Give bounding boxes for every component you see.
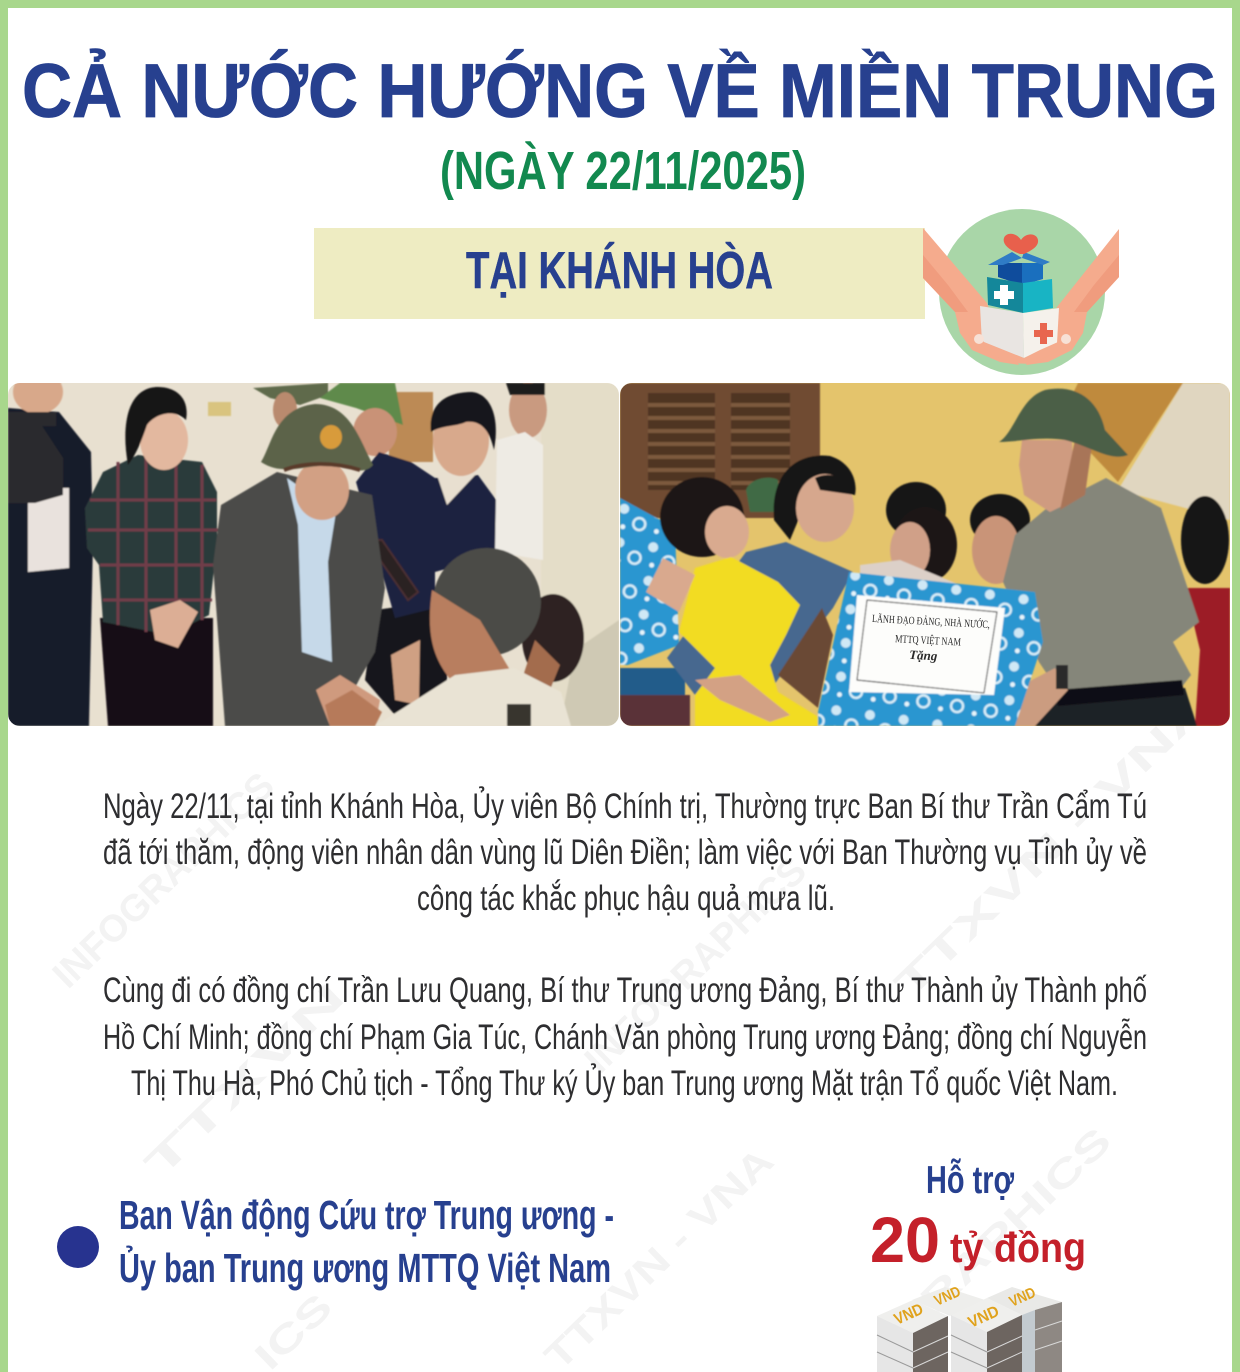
icon: stacks of VND banknotes: VND [932, 1283, 963, 1310]
people in background with helmets [253, 382, 547, 715]
woman and child [646, 455, 856, 726]
paragraph: visit summary: công tác khắc phục hậu quả mưa lũ. [417, 879, 835, 918]
icon: stacks of VND banknotes [877, 1283, 1062, 1372]
support amount: tỷ đồng [950, 1224, 1086, 1271]
main figure with pith helmet [213, 404, 385, 726]
photo: official greeting flood-hit residents [8, 370, 619, 726]
man with green pith helmet [999, 389, 1199, 726]
photo: handing gift box to residents [620, 383, 1230, 726]
section banner: Khánh Hòa [314, 228, 925, 319]
cameraman [8, 370, 93, 726]
paragraph: accompanying officials [103, 971, 1147, 1103]
infographic page: TTXVN - VNA [887, 685, 1218, 1006]
donor name: Ban Vận động Cứu trợ Trung ương - [119, 1192, 614, 1238]
support label: Hỗ trợ [926, 1158, 1014, 1202]
infographic page: INFOGRAPHICS [45, 765, 283, 996]
left gift box [620, 498, 679, 665]
infographic page: TTXVN [137, 976, 353, 1186]
infographic page: GRAPHICS [882, 1120, 1120, 1351]
subtitle: date: (NGÀY 22/11/2025) [440, 141, 806, 201]
gift box label text: Tặng [909, 647, 938, 663]
gift box label text: LÃNH ĐẠO ĐẢNG, NHÀ NƯỚC, [872, 613, 990, 631]
support amount: 20 [870, 1204, 940, 1276]
gift box label text [870, 613, 990, 666]
bullet marker [57, 1226, 99, 1268]
icon: stacks of VND banknotes: VND [966, 1303, 1002, 1332]
donor name [119, 1192, 614, 1291]
support amount [870, 1204, 1086, 1276]
icon: stacks of VND banknotes: VND [1007, 1284, 1038, 1311]
paragraph: visit summary [103, 786, 1147, 918]
donor name: Ủy ban Trung ương MTTQ Việt Nam [119, 1245, 611, 1291]
infographic page: INFOGRAPHICS [577, 850, 815, 1081]
icon: hands holding aid boxes [923, 209, 1119, 375]
man in navy polo [366, 392, 496, 600]
woman in plaid shirt [85, 387, 218, 726]
icon: stacks of VND banknotes: VND [892, 1301, 926, 1329]
seated residents [325, 548, 584, 726]
gift box with label [818, 572, 1043, 726]
section banner: Khánh Hòa: TẠI KHÁNH HÒA [466, 242, 773, 300]
people in background [746, 478, 1230, 726]
gift box label text: MTTQ VIỆT NAM [895, 633, 961, 649]
